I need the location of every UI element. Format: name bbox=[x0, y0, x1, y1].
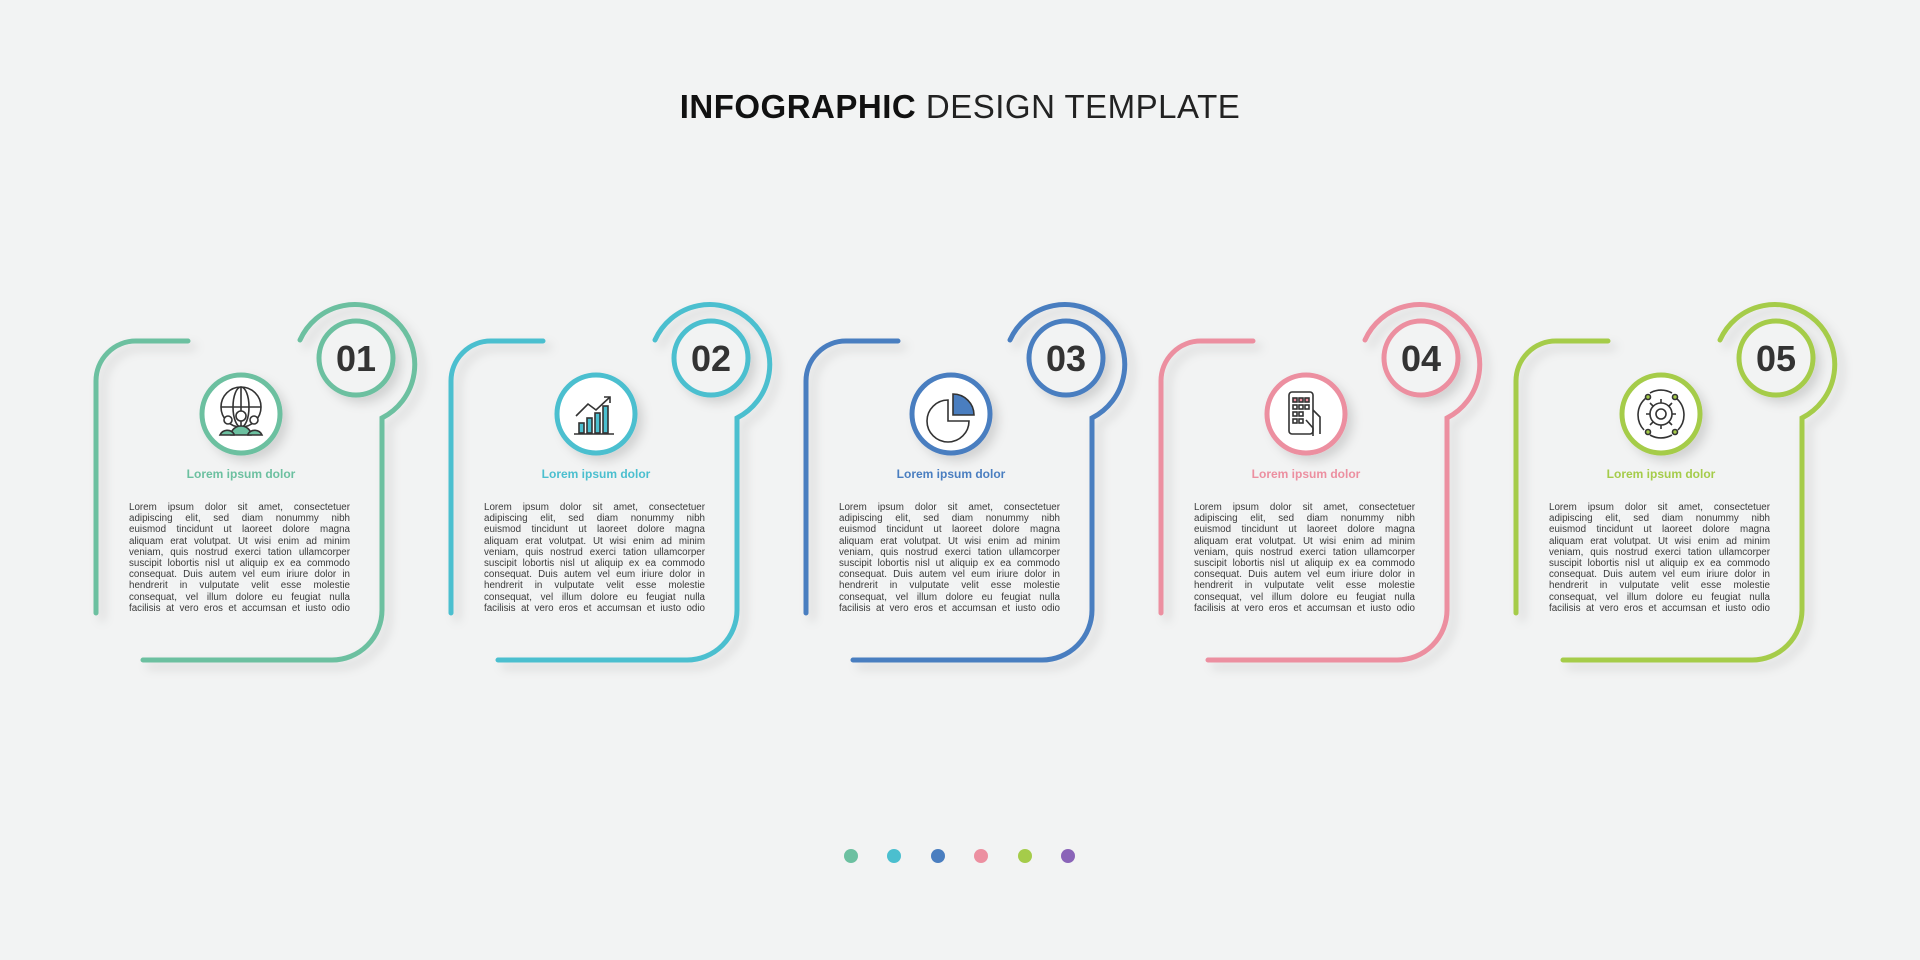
heading 3: Lorem ipsum dolor bbox=[897, 467, 1005, 481]
number 02: 02 bbox=[691, 338, 731, 379]
text block 2: consequat, vel illum dolore eu feugiat nulla bbox=[484, 592, 705, 603]
text block 1: facilisis at vero eros et accumsan et iusto odio bbox=[129, 603, 350, 614]
text block 4: hendrerit in vulputate velit esse molestie bbox=[1194, 580, 1415, 591]
number 04: 04 bbox=[1401, 338, 1441, 379]
text block 3: consequat, vel illum dolore eu feugiat nulla bbox=[839, 592, 1060, 603]
text block 3: facilisis at vero eros et accumsan et iusto odio bbox=[839, 603, 1060, 614]
number 01: 01 bbox=[336, 338, 376, 379]
panel: step 4 bbox=[1161, 305, 1480, 660]
text block 1: consequat. Duis autem vel eum iriure dolor in bbox=[129, 569, 350, 580]
text block 5: hendrerit in vulputate velit esse molestie bbox=[1549, 580, 1770, 591]
text block 2: Lorem ipsum dolor sit amet, consectetuer bbox=[484, 502, 705, 513]
heading 5: Lorem ipsum dolor bbox=[1607, 467, 1715, 481]
text block 4 bbox=[1194, 502, 1415, 614]
text block 4: suscipit lobortis nisl ut aliquip ex ea commodo bbox=[1194, 558, 1415, 569]
text block 4: facilisis at vero eros et accumsan et iusto odio bbox=[1194, 603, 1415, 614]
text block 2: euismod tincidunt ut laoreet dolore magna bbox=[484, 524, 705, 535]
title: INFOGRAPHIC DESIGN TEMPLATE bbox=[680, 88, 1240, 125]
text block 3: veniam, quis nostrud exerci tation ullamcorper bbox=[839, 547, 1060, 558]
text block 3 bbox=[839, 502, 1060, 614]
panel: step 5 bbox=[1516, 305, 1835, 660]
text block 5: veniam, quis nostrud exerci tation ullamcorper bbox=[1549, 547, 1770, 558]
text block 1: Lorem ipsum dolor sit amet, consectetuer bbox=[129, 502, 350, 513]
icon: bar chart bbox=[574, 397, 614, 434]
text block 1: suscipit lobortis nisl ut aliquip ex ea commodo bbox=[129, 558, 350, 569]
text block 5: consequat, vel illum dolore eu feugiat nulla bbox=[1549, 592, 1770, 603]
icon: pie chart bbox=[927, 394, 974, 442]
text block 4: adipiscing elit, sed diam nonummy nibh bbox=[1194, 513, 1415, 524]
text block 2: adipiscing elit, sed diam nonummy nibh bbox=[484, 513, 705, 524]
text block 5 bbox=[1549, 502, 1770, 614]
text block 1: adipiscing elit, sed diam nonummy nibh bbox=[129, 513, 350, 524]
heading 1: Lorem ipsum dolor bbox=[187, 467, 295, 481]
icon: gear cycle bbox=[1638, 390, 1684, 438]
text block 3: hendrerit in vulputate velit esse molestie bbox=[839, 580, 1060, 591]
icon: globe with people bbox=[220, 387, 262, 435]
panel: step 2 bbox=[451, 305, 770, 660]
text block 4: aliquam erat volutpat. Ut wisi enim ad minim bbox=[1194, 536, 1415, 547]
text block 1: consequat, vel illum dolore eu feugiat nulla bbox=[129, 592, 350, 603]
text block 5: aliquam erat volutpat. Ut wisi enim ad minim bbox=[1549, 536, 1770, 547]
text block 2 bbox=[484, 502, 705, 614]
text block 4: veniam, quis nostrud exerci tation ullamcorper bbox=[1194, 547, 1415, 558]
panel: step 3 bbox=[806, 305, 1125, 660]
text block 3: suscipit lobortis nisl ut aliquip ex ea commodo bbox=[839, 558, 1060, 569]
text block 3: euismod tincidunt ut laoreet dolore magna bbox=[839, 524, 1060, 535]
text block 1: veniam, quis nostrud exerci tation ullamcorper bbox=[129, 547, 350, 558]
text block 5: consequat. Duis autem vel eum iriure dolor in bbox=[1549, 569, 1770, 580]
text block 5: facilisis at vero eros et accumsan et iusto odio bbox=[1549, 603, 1770, 614]
heading 4: Lorem ipsum dolor bbox=[1252, 467, 1360, 481]
number 03: 03 bbox=[1046, 338, 1086, 379]
text block 3: adipiscing elit, sed diam nonummy nibh bbox=[839, 513, 1060, 524]
text block 2: hendrerit in vulputate velit esse molestie bbox=[484, 580, 705, 591]
text block 2: aliquam erat volutpat. Ut wisi enim ad minim bbox=[484, 536, 705, 547]
text block 2: facilisis at vero eros et accumsan et iusto odio bbox=[484, 603, 705, 614]
pagination dots bbox=[844, 849, 1075, 863]
text block 4: consequat. Duis autem vel eum iriure dolor in bbox=[1194, 569, 1415, 580]
text block 3: Lorem ipsum dolor sit amet, consectetuer bbox=[839, 502, 1060, 513]
panel: step 1 bbox=[96, 305, 415, 660]
number 05: 05 bbox=[1756, 338, 1796, 379]
text block 5: euismod tincidunt ut laoreet dolore magna bbox=[1549, 524, 1770, 535]
text block 1: aliquam erat volutpat. Ut wisi enim ad minim bbox=[129, 536, 350, 547]
text block 4: consequat, vel illum dolore eu feugiat nulla bbox=[1194, 592, 1415, 603]
text block 5: suscipit lobortis nisl ut aliquip ex ea commodo bbox=[1549, 558, 1770, 569]
text block 2: veniam, quis nostrud exerci tation ullamcorper bbox=[484, 547, 705, 558]
text block 2: suscipit lobortis nisl ut aliquip ex ea commodo bbox=[484, 558, 705, 569]
text block 1 bbox=[129, 502, 350, 614]
text block 1: euismod tincidunt ut laoreet dolore magna bbox=[129, 524, 350, 535]
text block 5: Lorem ipsum dolor sit amet, consectetuer bbox=[1549, 502, 1770, 513]
text block 1: hendrerit in vulputate velit esse molestie bbox=[129, 580, 350, 591]
text block 2: consequat. Duis autem vel eum iriure dolor in bbox=[484, 569, 705, 580]
text block 3: aliquam erat volutpat. Ut wisi enim ad minim bbox=[839, 536, 1060, 547]
text block 5: adipiscing elit, sed diam nonummy nibh bbox=[1549, 513, 1770, 524]
heading 2: Lorem ipsum dolor bbox=[542, 467, 650, 481]
icon: phone in hand bbox=[1289, 392, 1320, 436]
text block 4: Lorem ipsum dolor sit amet, consectetuer bbox=[1194, 502, 1415, 513]
text block 4: euismod tincidunt ut laoreet dolore magna bbox=[1194, 524, 1415, 535]
text block 3: consequat. Duis autem vel eum iriure dolor in bbox=[839, 569, 1060, 580]
